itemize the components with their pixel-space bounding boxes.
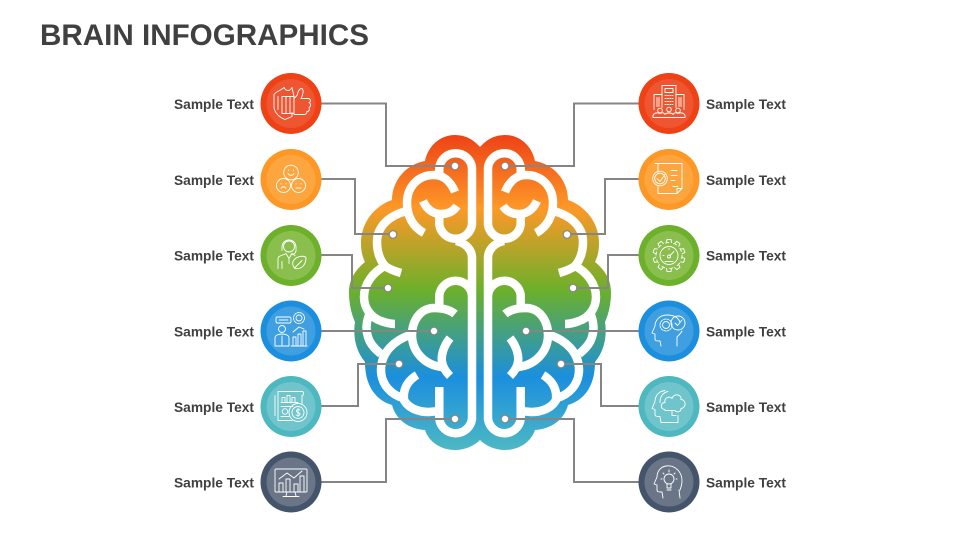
label L2: Sample Text (174, 173, 254, 188)
node L6 (451, 415, 459, 423)
label R2: Sample Text (706, 173, 786, 188)
icon: gear with gauge (653, 240, 685, 272)
circle R5 (638, 376, 700, 437)
left item 1 (174, 73, 459, 170)
connector R2 (567, 179, 642, 234)
node R3 (569, 284, 577, 292)
node R1 (501, 162, 509, 170)
node R6 (501, 415, 509, 423)
label L1: Sample Text (174, 97, 254, 112)
icon: report with coin (275, 392, 307, 422)
connector L4 (318, 330, 434, 332)
right item 3 (569, 225, 786, 292)
label R1: Sample Text (706, 97, 786, 112)
left item 4 (174, 300, 438, 362)
node L3 (384, 284, 392, 292)
node R5 (557, 360, 565, 368)
connector L6 (318, 419, 455, 482)
icon: support agent with leaf (278, 240, 306, 269)
node R2 (563, 231, 571, 238)
left item 3 (174, 225, 392, 292)
circle R1 (638, 73, 700, 134)
node L1 (451, 162, 459, 170)
brain silhouette (349, 135, 611, 450)
left item 5 (174, 360, 403, 437)
icon: analyst, gear and bars (275, 312, 307, 346)
right item 2 (563, 149, 786, 238)
connector R6 (505, 419, 642, 482)
label R4: Sample Text (706, 324, 786, 340)
circle L3 (260, 225, 322, 286)
label L3: Sample Text (174, 248, 254, 264)
connector L2 (318, 179, 393, 234)
left item 6 (174, 415, 459, 512)
icon: head with gear and check (652, 315, 685, 346)
circle L5 (260, 376, 322, 437)
icon: head with cloud (652, 390, 685, 422)
label L6: Sample Text (174, 476, 254, 490)
circle L1 (260, 73, 322, 134)
icon: office building with people (653, 86, 685, 118)
node L5 (395, 360, 403, 368)
connector R4 (526, 330, 642, 332)
icon: thumbs up with shirt (274, 88, 310, 120)
right item 6 (501, 415, 786, 512)
connector L5 (318, 364, 399, 406)
connector R1 (505, 104, 642, 166)
right item 5 (557, 360, 786, 437)
circle L4 (260, 300, 322, 362)
node L4 (430, 327, 438, 335)
circle R6 (638, 452, 700, 512)
circle R4 (638, 300, 700, 362)
icon: checklist document (653, 164, 682, 194)
left item 2 (174, 149, 397, 238)
connector R5 (561, 364, 642, 406)
brain illustration (349, 135, 611, 450)
circle R2 (638, 149, 700, 210)
connector L1 (318, 104, 455, 166)
circle R3 (638, 225, 700, 286)
title: BRAIN INFOGRAPHICS (40, 19, 369, 52)
icon: three faces (276, 165, 306, 192)
right item 1 (501, 73, 786, 170)
label R5: Sample Text (706, 400, 786, 415)
icon: head with light bulb (654, 466, 682, 498)
right hemisphere folds (488, 153, 596, 433)
circle L2 (260, 149, 322, 210)
label R6: Sample Text (706, 476, 786, 490)
icon: monitor chart (275, 469, 307, 496)
left hemisphere folds (364, 153, 472, 433)
connector L3 (318, 255, 388, 288)
label L4: Sample Text (174, 324, 254, 340)
node R4 (522, 327, 530, 335)
label L5: Sample Text (174, 400, 254, 415)
circle L6 (260, 452, 322, 512)
node L2 (389, 231, 397, 238)
right item 4 (522, 300, 786, 362)
connector R3 (573, 255, 642, 288)
label R3: Sample Text (706, 248, 786, 264)
